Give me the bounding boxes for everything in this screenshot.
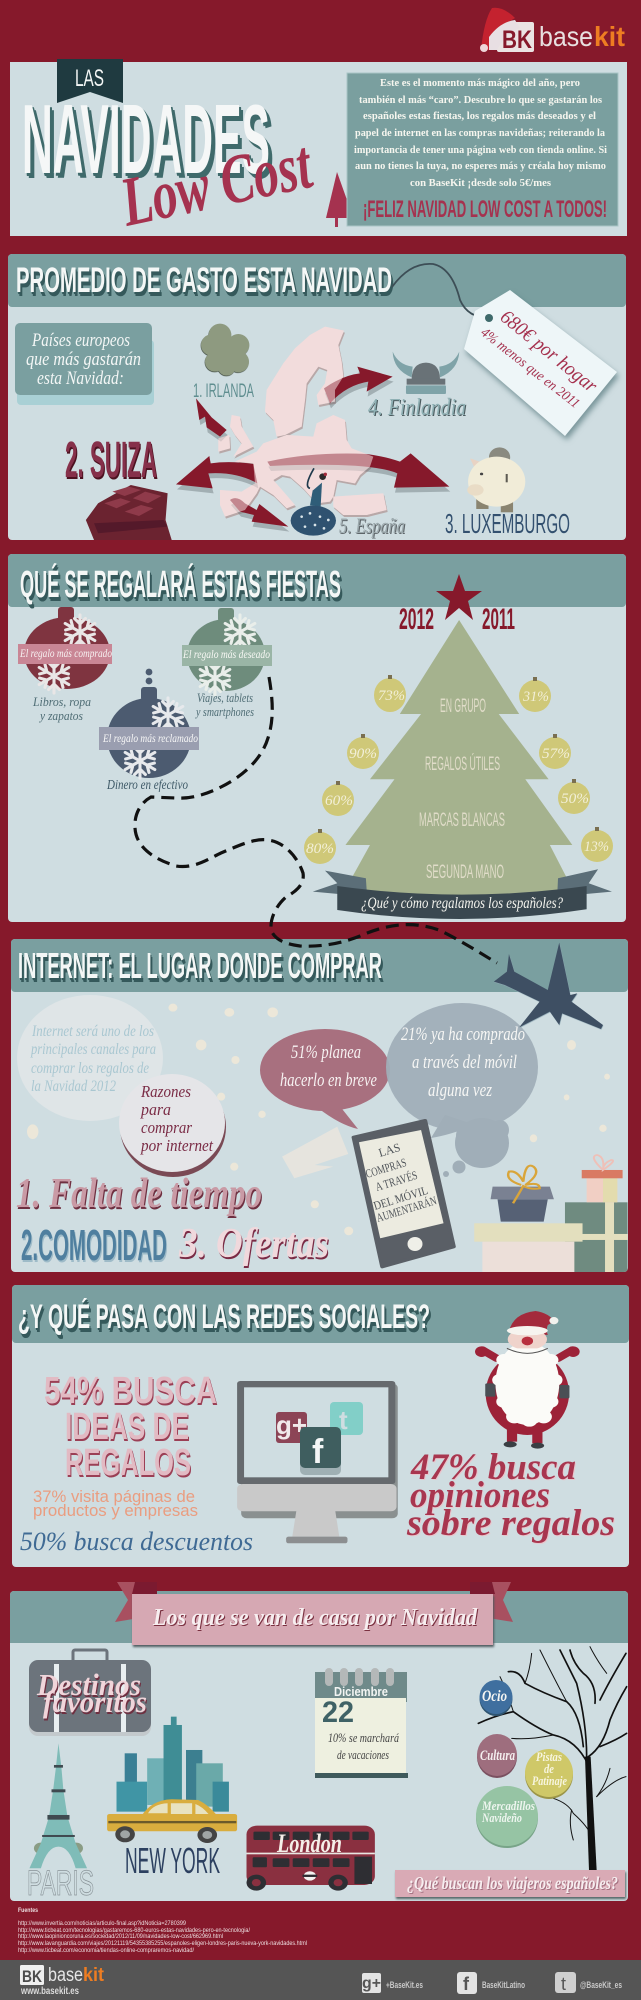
label: 4. Finlandia: 4. Finlandia — [368, 395, 466, 421]
label: 5. España: 5. España — [339, 513, 405, 538]
speech bubble: 51% planea: 51% planea — [291, 1042, 361, 1063]
baubles: percentages: 80% — [306, 841, 334, 857]
price tag: 4% menos que en 2011 — [478, 325, 582, 412]
icon: plane — [494, 943, 603, 1029]
calendar: 22 — [322, 1696, 354, 1729]
sources: http://www.ticbeat.com/economia/tiendas-online-compraremos-navidad/ — [18, 1947, 194, 1954]
calendar: Diciembre — [334, 1684, 388, 1699]
tree labels: SEGUNDA MANO — [426, 862, 504, 883]
text box: introduction: Este es el momento más mágico del año, pero — [380, 78, 580, 89]
icon: facebook: f — [312, 1433, 324, 1471]
circle: cultura — [477, 1734, 517, 1776]
circle: razones para comprar por internet: por internet — [140, 1136, 214, 1155]
icon: facebook — [300, 1427, 341, 1475]
circle: pistas de patinaje: de — [544, 1762, 554, 1776]
icon: london bus — [247, 1826, 375, 1891]
phone: COMPRAS — [364, 1155, 408, 1181]
speech bubble: 21% ya ha comprado — [386, 1003, 538, 1138]
icon: clover — [201, 324, 249, 376]
social: facebook — [457, 1972, 525, 1994]
circle: ocio: Ocio — [482, 1688, 507, 1705]
footer logo: base — [48, 1965, 83, 1986]
callout: países europeos — [15, 323, 154, 405]
text box: introduction: aun no tienes la tuya, no esperes más y créala hoy mismo — [355, 161, 606, 172]
panel: promedio de gasto: 2. SUIZA — [65, 431, 157, 488]
circle: internet será uno de los canales: comprar los regalos de — [31, 1060, 149, 1077]
label: 2012: 2012 — [399, 603, 434, 636]
icon: chocolate — [86, 485, 172, 540]
circle: mercadillos navideños: Navideño — [481, 1810, 522, 1825]
social: facebook: f — [463, 1974, 470, 1994]
baubles: percentages: 60% — [325, 793, 353, 809]
phone: AUMENTARÁN — [375, 1193, 438, 1225]
panel: los que se van de casa: NEW YORK — [125, 1840, 220, 1881]
stat: 47% busca opiniones sobre regalos: opiniones — [410, 1475, 550, 1516]
stat: 54% busca ideas de regalos — [44, 1370, 217, 1484]
caption: dinero en efectivo: Dinero en efectivo — [106, 778, 188, 793]
icon: new york skyline — [107, 1717, 237, 1843]
text box: introduction: importancia de tener una página web con tienda online. Si — [354, 145, 607, 156]
taxi — [107, 1799, 237, 1843]
heading: las navidades: LAS — [75, 65, 104, 92]
star — [436, 574, 482, 620]
ornament: el regalo más deseado — [182, 608, 272, 695]
text box: introduction: también el más “caro”. Descubre lo que se gastarán los — [359, 95, 602, 106]
circle: internet será uno de los canales: la Navidad 2012 — [31, 1078, 116, 1095]
callout: países europeos: que más gastarán — [26, 349, 141, 370]
ribbon: qué y cómo regalamos: ¿Qué y cómo regalamos los españoles? — [361, 895, 563, 912]
panel: qué se regalará: REGALOS ÚTILES — [425, 753, 500, 775]
icon: london bus: London — [276, 1829, 342, 1858]
baubles: percentages: 50% — [561, 791, 589, 807]
baubles: percentages: 31% — [522, 689, 549, 705]
panel: redes sociales — [12, 1285, 629, 1567]
tree labels — [419, 696, 505, 883]
circle: razones para comprar por internet: Razones — [140, 1082, 191, 1101]
panel: internet — [11, 939, 628, 1273]
panel: internet: 2.COMODIDAD — [21, 1221, 167, 1270]
logo: basekit with santa hat: base — [539, 21, 593, 52]
panel: qué se regalará: MARCAS BLANCAS — [419, 810, 505, 831]
ornament: el regalo más comprado: El regalo más comprado — [19, 646, 112, 660]
icon: small tree — [326, 172, 347, 227]
icon: viking helmet — [393, 352, 459, 394]
baubles: percentages — [304, 675, 613, 864]
ribbon: qué y cómo regalamos — [313, 869, 612, 919]
heading: low cost: Low Cost — [114, 126, 320, 242]
heading: las navidades — [22, 59, 270, 194]
baubles: percentages: 13% — [584, 839, 609, 855]
icon: santa claus — [475, 1311, 580, 1449]
stat: 37% visita páginas: productos y empresas — [33, 1502, 198, 1520]
price tag: 680€ por hogar — [496, 306, 602, 397]
stat: 54% busca ideas de regalos: REGALOS — [65, 1442, 191, 1484]
sources: http://www.lavanguardia.com/viajes/20121119/54355385255/espanoles-eligen-londres-paris-nueva-york-navidades.html — [18, 1940, 307, 1947]
phone: LAS — [377, 1140, 402, 1160]
sources: http://www.ticbeat.com/tecnologias/gastaremos-680-euros-estas-navidades-pero-en-tecnologia/ — [18, 1927, 250, 1934]
blank speech bubble — [282, 1127, 348, 1178]
christmas tree — [341, 620, 576, 897]
social: twitter — [555, 1972, 622, 1994]
label: 1. Irlanda: 1. IRLANDA — [193, 381, 254, 402]
banner: los que se van de casa por navidad — [115, 1582, 513, 1645]
dashed flight path — [135, 677, 497, 963]
sources — [18, 1907, 307, 1954]
speech bubble: 21% ya ha comprado: alguna vez — [428, 1080, 492, 1101]
ornament: el regalo más deseado: El regalo más deseado — [182, 647, 270, 661]
stat: 47% busca opiniones sobre regalos: sobre regalos — [406, 1503, 615, 1544]
label: 2011: 2011 — [482, 603, 515, 636]
circle: razones para comprar por internet: para — [140, 1100, 171, 1119]
caption: viajes, tablets y smartphones — [194, 691, 254, 719]
caption: libros, ropa y zapatos: y zapatos — [38, 708, 83, 723]
speech bubble: 21% ya ha comprado: a través del móvil — [412, 1052, 517, 1073]
icon: eiffel tower — [29, 1743, 87, 1868]
ornament: el regalo más comprado — [18, 607, 112, 693]
baubles: percentages: 57% — [542, 746, 570, 762]
stat: 54% busca ideas de regalos: IDEAS DE — [65, 1406, 189, 1448]
circle: razones para comprar por internet: comprar — [141, 1118, 192, 1137]
icon: suitcase: Destinos — [36, 1667, 141, 1702]
icon: suitcase: favoritos — [43, 1684, 147, 1719]
caption: libros, ropa y zapatos: Libros, ropa — [32, 694, 91, 709]
stat: 50% busca descuentos: 50% busca descuentos — [20, 1527, 253, 1556]
social: google plus — [362, 1973, 423, 1993]
circle: pistas de patinaje: Pistas — [536, 1750, 562, 1764]
calendar: 10% se marchará — [328, 1730, 399, 1745]
speech bubble: 51% planea — [260, 1029, 390, 1129]
text box: introduction: españoles estas fiestas, los regalos más deseados y el — [363, 111, 596, 122]
icon: piggy bank — [467, 447, 525, 512]
social: facebook: BaseKitLatino — [482, 1980, 525, 1991]
baubles: percentages: 90% — [349, 746, 377, 762]
circle: internet será uno de los canales: Internet será uno de los — [31, 1023, 154, 1040]
phone: A TRAVÉS — [374, 1168, 419, 1194]
text box: introduction: con BaseKit ¡desde solo 5€/mes — [410, 178, 551, 189]
logo: basekit with santa hat: kit — [594, 21, 625, 52]
panel: intro — [10, 59, 627, 242]
reason 1: falta de tiempo: 1. Falta de tiempo — [16, 1171, 262, 1217]
gifts — [474, 1155, 628, 1273]
calendar: de vacaciones — [337, 1747, 389, 1762]
map of Europe with arrows — [176, 327, 449, 527]
speech bubble: 51% planea: hacerlo en breve — [280, 1070, 377, 1091]
footer logo: BK — [22, 1967, 43, 1986]
icon: twitter: t — [339, 1405, 348, 1435]
footer logo: www.basekit.es — [20, 1986, 79, 1997]
stat: 37% visita páginas: 37% visita páginas de — [33, 1488, 195, 1506]
social: google plus: +BaseKit.es — [386, 1980, 423, 1991]
icon: twitter — [330, 1402, 363, 1435]
calendar — [315, 1668, 408, 1778]
banner: los que se van de casa por navidad: Los que se van de casa por Navidad — [152, 1605, 478, 1631]
label: Paris: PARIS — [27, 1864, 94, 1903]
icon: flamenco dancer — [291, 468, 336, 536]
banner: qué buscan los viajeros — [395, 1870, 625, 1897]
panel: los que se van de casa — [10, 1582, 628, 1903]
tree labels: EN GRUPO — [440, 696, 486, 717]
footer logo: kit — [83, 1965, 105, 1986]
panel: promedio de gasto — [8, 254, 626, 540]
ornament: el regalo más reclamado: El regalo más reclamado — [102, 731, 198, 745]
caption: viajes, tablets y smartphones: Viajes, tablets — [197, 691, 253, 705]
thought cloud — [443, 1118, 509, 1177]
sources: Fuentes — [18, 1907, 38, 1914]
text box: introduction — [347, 73, 618, 226]
ornament: el regalo más reclamado — [99, 669, 199, 778]
price tag — [392, 264, 617, 436]
circle: razones para comprar por internet — [119, 1074, 226, 1177]
text box: introduction: papel de internet en las compras navideñas; reiterando la — [355, 128, 606, 139]
sources: http://www.laopinioncoruna.es/sociedad/2012/11/09/navidades-low-cost/662969.html — [18, 1933, 223, 1940]
callout: países europeos: esta Navidad: — [37, 368, 124, 389]
speech bubble: 21% ya ha comprado: 21% ya ha comprado — [401, 1024, 525, 1045]
logo: basekit with santa hat — [480, 8, 625, 54]
circle: cultura: Cultura — [480, 1748, 515, 1764]
circle: mercadillos navideños: Mercadillos — [481, 1798, 535, 1813]
caption: viajes, tablets y smartphones: y smartphones — [194, 705, 254, 719]
baubles: percentages: 73% — [378, 688, 405, 704]
icon: google plus: g+ — [276, 1410, 307, 1440]
circle: mercadillos navideños — [476, 1786, 538, 1846]
stat: 47% busca opiniones sobre regalos — [406, 1447, 615, 1544]
footer logo — [20, 1965, 105, 1997]
phone: DEL MÓVIL — [372, 1183, 429, 1213]
circle: ocio — [480, 1680, 512, 1714]
logo: basekit with santa hat: BK — [502, 26, 532, 54]
social: twitter: t — [561, 1974, 566, 1994]
reason 3: ofertas: 3. Ofertas — [178, 1221, 329, 1267]
social: twitter: @BaseKit_es — [580, 1980, 622, 1991]
caption: libros, ropa y zapatos — [32, 694, 91, 723]
callout: países europeos: Países europeos — [31, 330, 130, 351]
snow dots — [27, 1004, 610, 1235]
sources: http://www.invertia.com/noticias/articulo-final.asp?idNoticia=2780399 — [18, 1920, 186, 1927]
phone — [354, 1121, 454, 1267]
circle: pistas de patinaje — [525, 1749, 573, 1797]
bare tree — [478, 1647, 627, 1870]
circle: pistas de patinaje: Patinaje — [532, 1774, 567, 1788]
stat: 47% busca opiniones sobre regalos: 47% busca — [410, 1447, 576, 1488]
stat: 37% visita páginas — [33, 1488, 198, 1520]
circle: internet será uno de los canales: principales canales para — [30, 1041, 156, 1058]
icon: suitcase — [29, 1650, 151, 1736]
panel: intro: NAVIDADES — [22, 84, 270, 194]
social: google plus: g+ — [362, 1975, 381, 1992]
stat: 54% busca ideas de regalos: 54% BUSCA — [44, 1370, 217, 1412]
footer — [0, 1960, 641, 2000]
panel: qué se regalará — [8, 554, 626, 922]
monitor — [237, 1381, 398, 1543]
circle: internet será uno de los canales — [17, 995, 163, 1121]
